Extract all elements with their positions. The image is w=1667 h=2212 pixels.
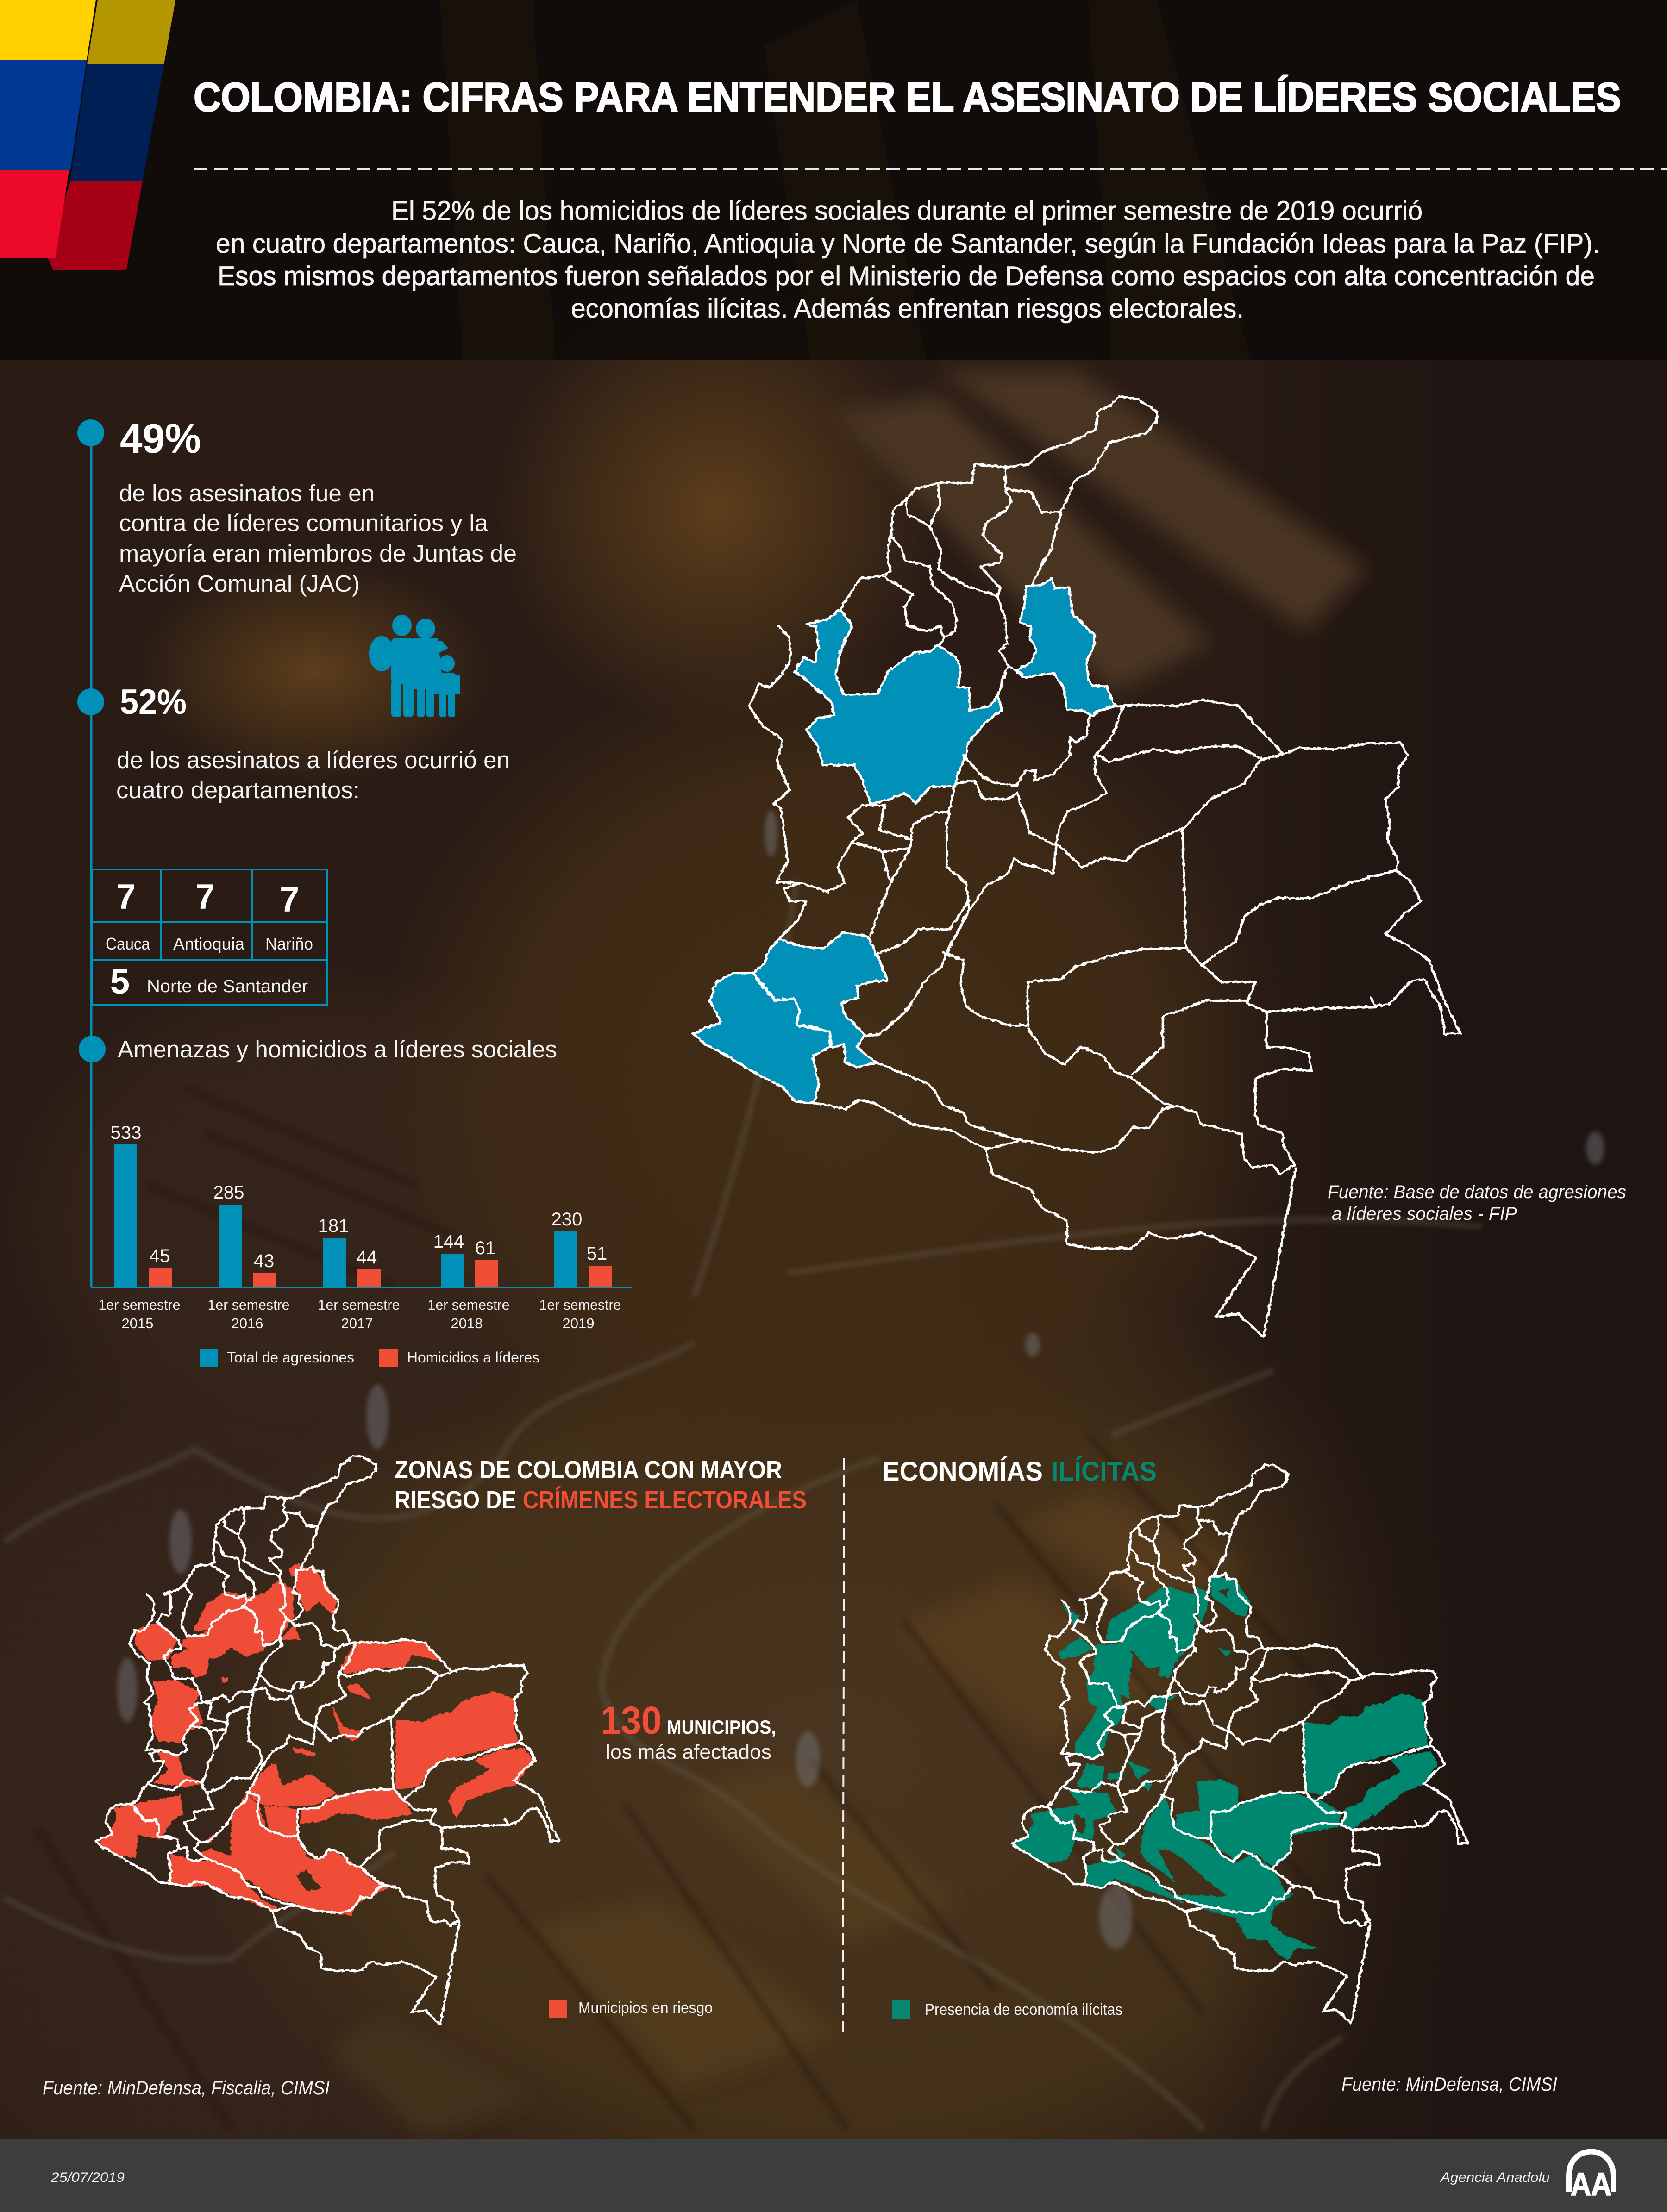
source: main map: [1328, 1182, 1626, 1224]
table: departments: Norte de Santander: [147, 977, 308, 996]
callout: 130 municipalities: MUNICIPIOS,: [667, 1716, 776, 1738]
map: departments with most homicides: [692, 395, 1459, 1337]
heading: electoral crimes: CRÍMENES ELECTORALES: [523, 1486, 807, 1514]
icon: Anadolu Agency logo: [1569, 2152, 1613, 2202]
heading: electoral crimes: [395, 1456, 807, 1514]
stat: 52%: 52%: [120, 682, 187, 722]
table: departments: 7: [280, 880, 299, 919]
table: departments: Cauca: [106, 934, 150, 953]
chart legend: Total de agresiones: [227, 1349, 354, 1366]
bar chart: 1er semestre: [539, 1297, 621, 1313]
heading: electoral crimes: ZONAS DE COLOMBIA CON MAYOR: [395, 1456, 782, 1484]
intro paragraph: Esos mismos departamentos fueron señalados por el Ministerio de Defensa como espacios con alta concentración de: [218, 261, 1595, 291]
bar chart: [91, 1123, 632, 1331]
text: four departments: cuatro departamentos:: [116, 777, 360, 803]
map: illicit economies: [1011, 1464, 1467, 2023]
legend: illicit economies: Presencia de economía ilícitas: [925, 2001, 1122, 2018]
bar chart: 533: [111, 1123, 141, 1143]
intro paragraph: El 52% de los homicidios de líderes sociales durante el primer semestre de 2019 ocurrió: [391, 196, 1423, 226]
footer band: [0, 2139, 1667, 2212]
heading: illicit economies: [882, 1456, 1157, 1487]
bar chart: 144: [433, 1231, 464, 1252]
text: community leaders: contra de líderes comunitarios y la: [119, 510, 489, 536]
table: departments: 7: [195, 877, 215, 917]
callout: 130 municipalities: 130: [601, 1699, 662, 1742]
bar chart: 181: [318, 1216, 349, 1236]
heading: electoral crimes: RIESGO DE: [395, 1486, 516, 1514]
intro paragraph: [216, 196, 1600, 324]
bar chart: 51: [587, 1243, 607, 1264]
icon: Anadolu Agency logo: AA: [1571, 2166, 1611, 2202]
marker: threats and homicides: [79, 1036, 106, 1062]
heading: illicit economies: ILÍCITAS: [1051, 1456, 1157, 1487]
bar chart: 2016: [232, 1315, 263, 1331]
legend: municipalities at risk: Municipios en riesgo: [578, 1999, 713, 2017]
chart legend: [200, 1349, 539, 1367]
intro paragraph: en cuatro departamentos: Cauca, Nariño, Antioquia y Norte de Santander, según la Fundación Ideas para la Paz (FIP).: [216, 229, 1600, 259]
callout: 130 municipalities: los más afectados: [606, 1741, 771, 1763]
marker: 49%: [77, 419, 104, 446]
bar chart: 230: [551, 1209, 582, 1230]
flag of Colombia: [0, 0, 175, 270]
callout: 130 municipalities: [601, 1699, 776, 1763]
source: left map: Fuente: MinDefensa, Fiscalia, CIMSI: [43, 2077, 330, 2099]
source: right map: Fuente: MinDefensa, CIMSI: [1341, 2073, 1557, 2095]
map: electoral crime risk: [94, 1455, 558, 2024]
bar chart: 285: [213, 1182, 244, 1203]
table: departments: [92, 869, 327, 1005]
chart legend: Homicidios a líderes: [407, 1349, 539, 1366]
header band: [0, 0, 1667, 360]
source: main map: Fuente: Base de datos de agresiones: [1328, 1182, 1626, 1202]
bar chart: 1er semestre: [428, 1297, 509, 1313]
bar chart: 43: [254, 1251, 274, 1271]
text: community leaders: Acción Comunal (JAC): [119, 570, 360, 597]
timeline line: [90, 433, 93, 1287]
bar chart: 2018: [451, 1315, 483, 1331]
intro paragraph: economías ilícitas. Además enfrentan riesgos electorales.: [571, 294, 1244, 324]
text: community leaders: de los asesinatos fue en: [119, 480, 375, 506]
bar chart: 61: [475, 1238, 495, 1258]
marker: 52%: [77, 688, 104, 715]
footer date: 25/07/2019: [50, 2170, 125, 2185]
icon: family: [369, 615, 460, 717]
bar chart: 2019: [563, 1315, 594, 1331]
stat: 49%: 49%: [120, 416, 201, 462]
text: four departments: de los asesinatos a líderes ocurrió en: [117, 747, 510, 773]
table: departments: Nariño: [265, 934, 313, 953]
chart heading: Amenazas y homicidios a líderes sociales: [118, 1036, 557, 1062]
bar chart: 45: [150, 1246, 170, 1266]
bar chart: 1er semestre: [207, 1297, 290, 1313]
bar chart: 1er semestre: [98, 1297, 181, 1313]
table: departments: Antioquia: [173, 934, 245, 953]
footer agency name: Agencia Anadolu: [1440, 2170, 1550, 2185]
text: community leaders: [119, 480, 517, 597]
table: departments: 5: [110, 962, 130, 1001]
table: departments: 7: [116, 877, 136, 917]
source: main map: a líderes sociales - FIP: [1332, 1204, 1517, 1224]
text: four departments: [116, 747, 510, 803]
bar chart: 44: [357, 1247, 377, 1268]
bar chart: 2015: [122, 1315, 153, 1331]
bar chart: 1er semestre: [318, 1297, 400, 1313]
bar chart: 2017: [341, 1315, 373, 1331]
text: community leaders: mayoría eran miembros de Juntas de: [119, 540, 517, 567]
heading: illicit economies: ECONOMÍAS: [882, 1456, 1043, 1487]
